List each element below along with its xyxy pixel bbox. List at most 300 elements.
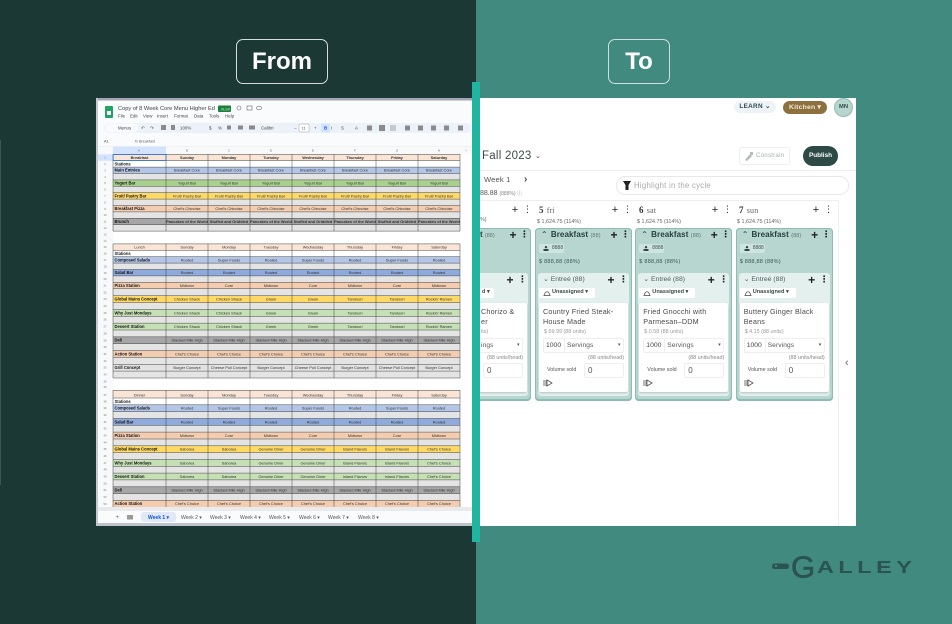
dinner table: Chef's Choice <box>427 447 451 452</box>
lunch table: Stacked Mile High <box>255 338 287 343</box>
dinner table: Chef's Choice <box>427 474 451 479</box>
spreadsheet toolbar chrome: View <box>143 114 153 118</box>
column and row headers: H <box>438 148 440 152</box>
dinner table: Chef's Choice <box>343 501 367 506</box>
spreadsheet toolbar chrome: S <box>341 126 344 130</box>
lunch table: Chicken Shack <box>216 324 242 329</box>
lunch table: Chicken Shack <box>174 297 200 302</box>
recipe card: Parmesan–DDM <box>643 317 699 326</box>
lunch table: Chef's Choice <box>301 351 325 356</box>
breakfast table: Sunday <box>180 155 195 160</box>
column and row headers: 48 <box>103 468 107 472</box>
spreadsheet toolbar chrome <box>98 100 472 146</box>
lunch table: Greek <box>308 310 318 315</box>
lunch table: Rooted <box>181 257 193 262</box>
day header: partial column <box>480 204 532 223</box>
dinner table: Island Flavors <box>343 460 367 465</box>
lunch table: Chicken Shack <box>216 310 242 315</box>
lunch table: Chicken Shack <box>216 297 242 302</box>
column and row headers: 29 <box>103 338 107 342</box>
recipe card: ▾ <box>819 342 821 348</box>
entree section: Unassigned ▾ <box>552 289 588 295</box>
column and row headers: 7 <box>104 194 106 198</box>
column and row headers: B <box>186 148 188 152</box>
day cost: sat: $ 1,624.75 (114%) <box>637 219 681 225</box>
breakfast table: Thursday <box>346 155 365 160</box>
recipe card <box>639 303 728 392</box>
day header: partial column: + <box>512 204 518 216</box>
spreadsheet toolbar chrome: A <box>355 126 358 130</box>
breakfast table: Pancakes of the World <box>334 219 376 224</box>
card: partial thursday breakfast <box>434 228 531 401</box>
breakfast table: Chef's Chinoise <box>215 206 243 211</box>
dinner table: Rooted <box>433 419 445 424</box>
breakfast table: Fruit/ Pastry Bar <box>173 193 202 198</box>
breakfast table: Chef's Chinoise <box>341 206 369 211</box>
dinner table: Rooted <box>223 419 235 424</box>
card: partial thursday breakfast: + <box>509 228 516 242</box>
column and row headers: G <box>396 148 399 152</box>
breakfast table: Breakfast Core <box>384 168 410 173</box>
breakfast table: Fruit/ Pastry Bar <box>257 193 286 198</box>
dinner table: Island Flavors <box>385 474 409 479</box>
recipe card: Beans <box>744 317 765 326</box>
lunch table: Tandoori <box>348 324 363 329</box>
lunch table: Cheese Pull Concept <box>211 365 248 370</box>
column and row headers: 45 <box>103 447 107 451</box>
entree section: ⋮ <box>619 275 628 285</box>
spreadsheet toolbar chrome: − <box>294 126 297 130</box>
dinner table: Saborea <box>180 474 195 479</box>
card: partial thursday breakfast: ▾ <box>517 342 520 348</box>
dinner table: Chef's Choice <box>427 501 451 506</box>
card: saturday breakfast <box>635 228 732 401</box>
entree section: ⌄ Entreé (88) <box>744 276 785 283</box>
breakfast table: Breakfast Core <box>342 168 368 173</box>
breakfast table: Fruit/ Pastry Bar <box>383 193 412 198</box>
spreadsheet toolbar chrome: Data <box>194 114 204 118</box>
recipe card: Volume sold <box>647 367 677 373</box>
dinner table: Chef's Choice <box>175 501 199 506</box>
dinner table: Rooted <box>307 419 319 424</box>
breakfast table: Breakfast <box>131 155 149 160</box>
column and row headers: 47 <box>103 461 107 465</box>
side divider <box>838 200 839 526</box>
recipe card: 0 <box>688 366 693 375</box>
dinner table: Saborea <box>222 460 237 465</box>
lunch table: Saturday <box>431 244 447 250</box>
lunch table: Greek <box>266 310 276 315</box>
day cost: sun: $ 1,624.75 (114%) <box>737 219 781 225</box>
column and row headers: D <box>270 148 273 152</box>
headcount pill <box>539 244 564 253</box>
lunch table: Midtown <box>432 283 446 288</box>
day header: 7 sun: 7 sun <box>739 205 758 215</box>
sheet tabs: Week 6 ▾ <box>299 515 320 521</box>
column and row headers: 6 <box>104 188 106 192</box>
spreadsheet toolbar chrome: Insert <box>157 114 169 118</box>
heading: From: From <box>252 48 312 75</box>
entree section: + <box>708 273 715 287</box>
card: partial thursday breakfast: + <box>506 273 514 287</box>
dinner table: Rooted <box>349 419 361 424</box>
day menu: fri: ⋮ <box>623 205 632 215</box>
headcount pill: 8888 <box>753 245 764 251</box>
recipe card: ▾ <box>718 342 721 348</box>
lunch table: Sunday <box>180 244 194 250</box>
recipe card: Volume sold <box>748 367 777 373</box>
column and row headers: 13 <box>103 232 107 236</box>
column and row headers: 12 <box>103 226 107 230</box>
lunch table: Action Station <box>114 351 143 356</box>
recipe card <box>740 303 829 392</box>
sheet tabs: Week 7 ▾ <box>328 515 349 521</box>
lunch table: Cheese Pull Concept <box>295 365 332 370</box>
card: partial thursday breakfast: its) <box>481 329 488 335</box>
column and row headers: 4 <box>104 175 106 179</box>
lunch table: Friday <box>392 244 402 250</box>
lunch table: Rooted <box>349 257 361 262</box>
dinner table: Rooted <box>181 419 193 424</box>
lunch table: Stacked Mile High <box>213 338 245 343</box>
breakfast table: Yogurt Bar <box>114 180 136 186</box>
dinner table: Genuine Diner <box>258 447 284 452</box>
column and row headers: 41 <box>103 420 107 424</box>
spreadsheet toolbar chrome: Format <box>174 114 189 118</box>
lunch table: Thursday <box>347 244 363 250</box>
card: partial thursday breakfast: ings <box>481 342 494 349</box>
dinner table: Stacked Mile High <box>297 488 329 493</box>
recipe card: Buttery Ginger Black <box>744 307 814 316</box>
lunch table: Rooted <box>307 270 319 275</box>
dinner table: Saborea <box>180 447 195 452</box>
column and row headers: 46 <box>103 454 107 458</box>
column and row headers: 25 <box>103 311 107 315</box>
spreadsheet toolbar chrome: Tools <box>209 114 220 118</box>
column and row headers: 38 <box>103 399 107 403</box>
recipe card: Fried Gnocchi with <box>643 307 706 316</box>
dinner table: Wednesday <box>303 392 323 397</box>
dinner table: Dessert Station <box>114 474 145 479</box>
recipe card: (88 units/head) <box>789 355 825 361</box>
breakfast table <box>114 155 460 224</box>
day header: 5 fri: 5 fri <box>539 205 555 215</box>
breakfast table: Breakfast Core <box>426 168 452 173</box>
lunch table: Salad Bar <box>114 270 134 275</box>
column and row headers: 14 <box>103 239 107 243</box>
dinner table: Midtown <box>432 433 446 438</box>
lunch table: Stacked Mile High <box>171 338 203 343</box>
column and row headers: 44 <box>103 440 107 444</box>
dinner table: Deli <box>114 488 122 493</box>
breakfast table: Fruit/ Pastry Bar <box>114 193 147 198</box>
card: partial thursday breakfast: 0 <box>487 366 491 375</box>
dinner table: Island Flavors <box>343 447 367 452</box>
column and row headers: 49 <box>103 474 107 478</box>
column and row headers: 39 <box>103 406 107 410</box>
sheet row bands <box>113 154 460 507</box>
column and row headers: 2 <box>104 162 106 166</box>
dinner table: Core <box>393 433 401 438</box>
breakfast table: Monday <box>222 155 237 160</box>
column and row headers: 15 <box>103 245 107 249</box>
headcount pill: 8888 <box>652 245 663 251</box>
lunch table: Tuesday <box>264 244 278 250</box>
column and row headers: 24 <box>103 304 107 308</box>
dinner table: Island Flavors <box>385 447 409 452</box>
spreadsheet toolbar chrome: fx Breakfast <box>135 140 156 144</box>
dinner table: Genuine Diner <box>300 460 326 465</box>
lunch table: Chef's Choice <box>217 351 241 356</box>
dinner table: Core <box>225 433 233 438</box>
sheet tabs: Week 1 ▾ <box>148 515 170 521</box>
column and row headers: F <box>354 148 356 152</box>
lunch table: Burger Concept <box>257 365 286 370</box>
logo: Galley: ALLEY <box>817 557 915 577</box>
lunch table: Tandoori <box>348 310 363 315</box>
lunch table: Burger Concept <box>425 365 454 370</box>
breakfast table: Main Entrées <box>114 168 141 173</box>
spreadsheet toolbar chrome: I <box>331 126 332 130</box>
lunch table: Super Foods <box>302 257 324 262</box>
dinner table: Stacked Mile High <box>171 488 203 493</box>
publish button <box>803 146 838 166</box>
lunch table: Chef's Choice <box>343 351 367 356</box>
day header: partial column: %) <box>480 217 487 223</box>
column and row headers: 42 <box>103 427 107 431</box>
dinner table: Chef's Choice <box>427 460 451 465</box>
user avatar <box>834 98 853 117</box>
next week arrow: › <box>524 174 527 185</box>
lunch table: Rockin' Ramen <box>426 310 452 315</box>
column and row headers: 19 <box>103 271 107 275</box>
breakfast table: Breakfast Core <box>216 168 242 173</box>
lunch table: Pizza Station <box>114 283 140 288</box>
column and row headers: 43 <box>103 434 107 438</box>
left dark background <box>0 0 476 624</box>
dinner table: Super Foods <box>302 406 324 411</box>
recipe card: Servings <box>567 342 593 349</box>
recipe card: House Made <box>543 317 586 326</box>
left edge line <box>0 140 1 485</box>
day actions: fri: + <box>612 204 618 216</box>
spreadsheet toolbar chrome: B <box>324 126 328 130</box>
card: partial thursday breakfast: Chorizo & <box>481 307 514 316</box>
column and row headers: 52 <box>103 495 107 499</box>
breakfast table: Tuesday <box>263 155 280 160</box>
recipe card: $ 0.58 (88 units) <box>644 329 683 335</box>
dinner table: Rooted <box>433 406 445 411</box>
search box: Highlight in the cycle <box>634 181 711 190</box>
lunch table: Cheese Pull Concept <box>379 365 416 370</box>
card: partial thursday breakfast: d ▾ <box>482 289 490 295</box>
spreadsheet toolbar chrome: .XLSX <box>220 108 231 112</box>
user avatar: MN <box>839 104 848 110</box>
lunch table: Core <box>309 283 317 288</box>
spreadsheet toolbar chrome: + <box>314 126 317 130</box>
spreadsheet toolbar chrome: File <box>118 114 126 118</box>
heading: To: To <box>625 48 653 75</box>
dinner table: Island Flavors <box>385 460 409 465</box>
column and row headers: 33 <box>103 366 107 370</box>
column and row headers: 40 <box>103 413 107 417</box>
meal cost: $ 888,88 (88%) <box>639 259 680 265</box>
column and row headers: 1 <box>104 156 106 160</box>
recipe card: Servings <box>667 342 694 349</box>
breakfast table: Stuffed and Griddled <box>294 219 333 224</box>
dinner table: Stacked Mile High <box>423 488 455 493</box>
lunch table: Stations <box>114 251 131 256</box>
meal heading: ⌃ Breakfast (88) <box>641 230 701 239</box>
lunch table: Midtown <box>180 283 194 288</box>
breakfast table: Breakfast Pizza <box>114 206 145 211</box>
recipe card: 1000 <box>546 342 561 349</box>
recipe card <box>539 303 628 392</box>
center divider bar <box>472 82 480 542</box>
breakfast table: Breakfast Core <box>174 168 200 173</box>
lunch table: Midtown <box>348 283 362 288</box>
day menu: sun: ⋮ <box>824 205 833 215</box>
panel: Galley app screenshot <box>480 98 856 526</box>
lunch table: Grill Concept <box>114 365 141 370</box>
day header: 6 sat: 6 sat <box>639 205 656 215</box>
week selector: Week 1 <box>484 175 511 184</box>
breakfast table: Pancakes of the World <box>166 219 208 224</box>
breakfast table: Chef's Chinoise <box>299 206 327 211</box>
lunch table <box>114 244 455 370</box>
column and row headers: E <box>312 148 314 152</box>
column and row headers: 37 <box>103 393 107 397</box>
lunch table: Chef's Choice <box>385 351 409 356</box>
breakfast table: Chef's Chinoise <box>257 206 285 211</box>
column and row headers: 27 <box>103 325 107 329</box>
card: partial thursday breakfast: t (88) <box>480 230 495 239</box>
recipe card: (88 units/head) <box>688 355 724 361</box>
breakfast table: Fruit/ Pastry Bar <box>299 193 328 198</box>
spreadsheet toolbar chrome: $ <box>209 126 212 130</box>
lunch table: Super Foods <box>386 257 408 262</box>
headcount pill <box>639 244 664 253</box>
dinner table: Stacked Mile High <box>255 488 287 493</box>
lunch table: Why Just Mondays <box>114 310 152 315</box>
recipe card: 0 <box>588 366 592 375</box>
dinner table: Dinner <box>134 392 146 397</box>
card: sunday breakfast <box>736 228 833 401</box>
entree section: ⌄ Entreé (88) <box>543 276 585 283</box>
recipe card: Volume sold <box>547 367 576 373</box>
lunch table: Greek <box>266 297 276 302</box>
column and row headers: 9 <box>104 207 106 211</box>
dinner table: Saturday <box>431 392 447 397</box>
breakfast table: Stuffed and Griddled <box>210 219 249 224</box>
column and row headers: I <box>466 148 467 152</box>
breakfast table: Yogurt Bar <box>346 180 365 186</box>
meal cost: $ 888,88 (88%) <box>740 259 781 265</box>
entree section: Unassigned ▾ <box>652 289 688 295</box>
dinner table: Super Foods <box>218 406 240 411</box>
dinner table: Salad Bar <box>114 419 134 424</box>
breakfast table: Pancakes of the World <box>250 219 292 224</box>
recipe card: (88 units/head) <box>588 355 624 361</box>
lunch table: Rooted <box>433 270 445 275</box>
top learn menu <box>734 101 776 113</box>
dinner table: Saborea <box>222 474 237 479</box>
dinner table: Genuine Diner <box>258 474 284 479</box>
lunch table: Chef's Choice <box>259 351 283 356</box>
sheet tabs: Week 5 ▾ <box>269 515 290 521</box>
column and row headers: 20 <box>103 277 107 281</box>
recipe card: 1000 <box>646 342 661 349</box>
lunch table: Burger Concept <box>341 365 370 370</box>
breakfast table: Breakfast Core <box>300 168 326 173</box>
card: sunday breakfast: ⋮ <box>822 230 831 240</box>
dinner table: Sunday <box>180 392 194 397</box>
breakfast table: Brunch <box>114 219 129 224</box>
breakfast table: Fruit/ Pastry Bar <box>341 193 370 198</box>
dinner table: Stacked Mile High <box>381 488 413 493</box>
icon: lamp <box>623 181 631 190</box>
logo: Galley: G <box>791 550 815 584</box>
breakfast table: Stations <box>114 161 131 166</box>
header divider <box>480 170 856 171</box>
lunch table: Stacked Mile High <box>339 338 371 343</box>
lunch table: Core <box>225 283 233 288</box>
sheet tabs: Week 3 ▾ <box>210 515 231 521</box>
breakfast table: Chef's Chinoise <box>425 206 453 211</box>
meal cost: $ 888,88 (88%) <box>539 259 580 265</box>
dinner table: Island Flavors <box>343 474 367 479</box>
column and row headers: 8 <box>104 200 106 204</box>
recipe card: Country Fried Steak- <box>543 307 613 316</box>
column and row headers: 36 <box>103 385 107 389</box>
dinner table: Midtown <box>180 433 194 438</box>
lunch table: Rooted <box>181 270 193 275</box>
week cost: 88.88 (888%) ⓘ <box>480 190 522 197</box>
dinner table: Stacked Mile High <box>213 488 245 493</box>
card: partial thursday breakfast: (88 units/head) <box>487 355 523 361</box>
lunch table: Rockin' Ramen <box>426 324 452 329</box>
breakfast table: Stuffed and Griddled <box>378 219 417 224</box>
column and row headers: 32 <box>103 359 107 363</box>
breakfast table: Yogurt Bar <box>220 180 239 186</box>
dinner table: Super Foods <box>386 406 408 411</box>
column and row headers: 50 <box>103 481 107 485</box>
lunch table: Core <box>393 283 401 288</box>
collapse chevron: ‹ <box>845 357 849 369</box>
spreadsheet toolbar chrome: Calibri <box>261 126 273 130</box>
sheet tabs: Week 2 ▾ <box>181 515 202 521</box>
entree section: + <box>808 273 815 287</box>
spreadsheet toolbar chrome: ↶ <box>141 126 145 130</box>
column and row headers: 34 <box>103 372 107 376</box>
lunch table: Composed Salads <box>114 257 151 262</box>
column and row headers: 26 <box>103 318 107 322</box>
lunch table: Tandoori <box>390 297 405 302</box>
column and row headers: 23 <box>103 297 107 301</box>
lunch table: Chicken Shack <box>174 310 200 315</box>
recipe card: $ 4.15 (88 units) <box>745 329 784 335</box>
breakfast table: Wednesday <box>302 155 325 160</box>
publish button: Publish <box>809 152 832 159</box>
lunch table: Stacked Mile High <box>297 338 329 343</box>
dinner table: Friday <box>392 392 402 397</box>
column and row headers: 22 <box>103 290 107 294</box>
dinner table: Tuesday <box>264 392 278 397</box>
breakfast table: Yogurt Bar <box>388 180 407 186</box>
kitchen selector: Kitchen ▾ <box>789 104 821 111</box>
heading: To <box>608 39 670 84</box>
column and row headers: 3 <box>104 168 106 172</box>
